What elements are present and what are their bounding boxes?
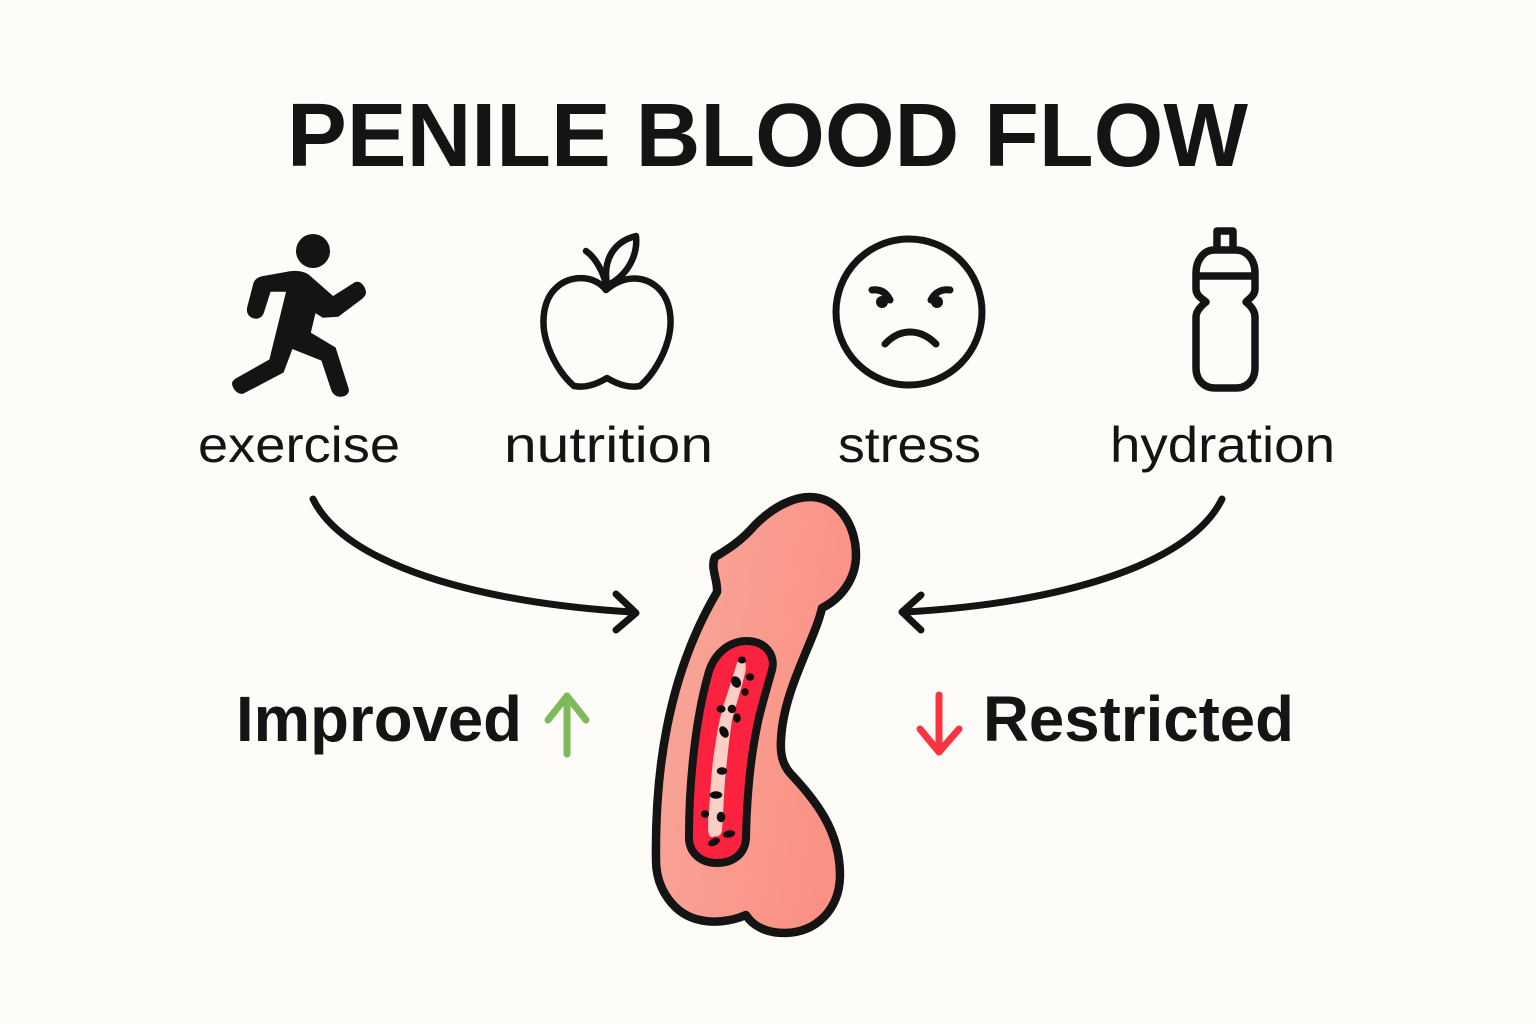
icon: apple: [543, 236, 671, 387]
icon: red down arrow: [920, 695, 959, 752]
label: hydration: hydration: [1110, 417, 1335, 473]
icon: green up arrow: [548, 696, 586, 754]
title: PENILE BLOOD FLOW: [287, 86, 1248, 186]
label: stress: stress: [838, 417, 981, 473]
icon: runner: [233, 234, 365, 396]
label: restricted: Restricted: [983, 683, 1294, 755]
icon: stressed face: [836, 239, 982, 385]
icon: water bottle: [1196, 231, 1255, 388]
outer organ shape: [656, 497, 856, 933]
anatomy diagram: [656, 497, 856, 933]
label: improved: Improved: [236, 683, 522, 755]
blood vessel lumen: [708, 661, 746, 837]
arrow: left factors to anatomy: [313, 499, 636, 630]
label: exercise: exercise: [198, 417, 400, 473]
arrow: right factors to anatomy: [902, 499, 1222, 630]
label: nutrition: nutrition: [504, 417, 713, 473]
blood vessel wall: [689, 641, 773, 863]
blood cells and deposits: [701, 656, 754, 848]
